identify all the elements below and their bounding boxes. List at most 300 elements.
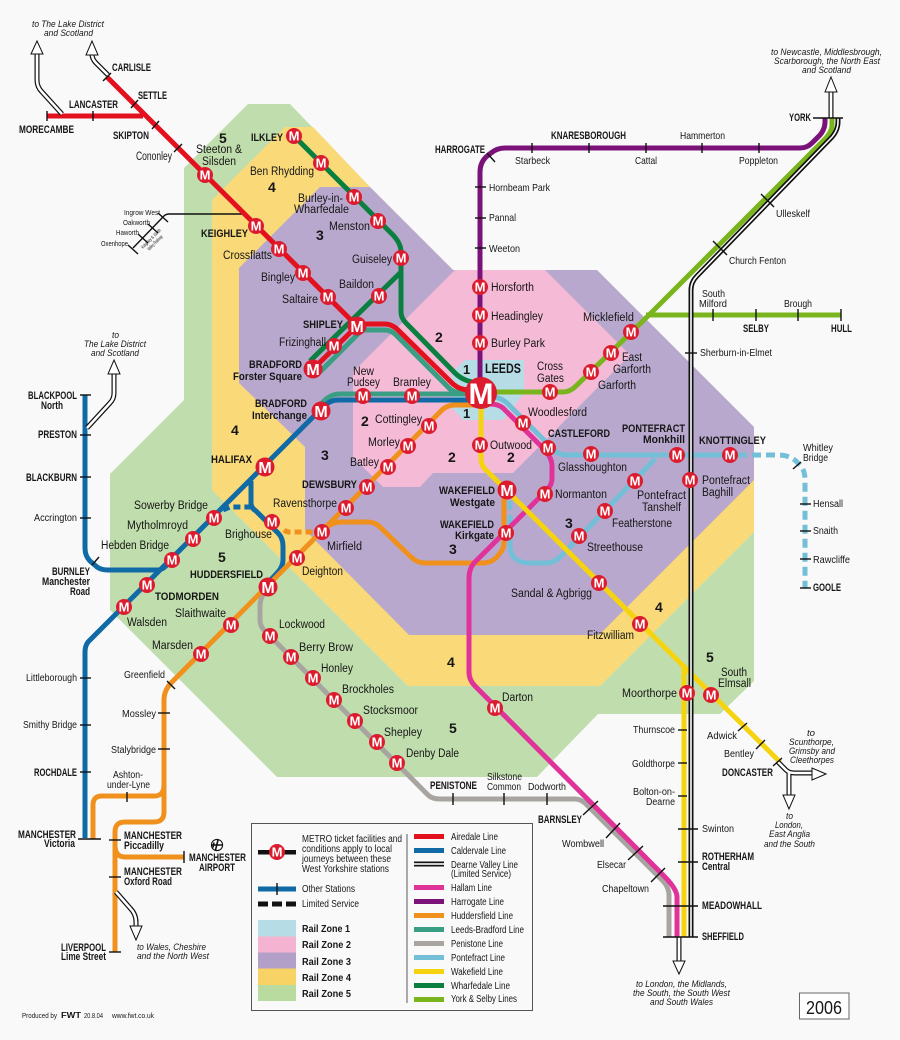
- station: Berry Brow: M: [286, 650, 296, 665]
- station: Wakefield Westgate: [439, 480, 516, 509]
- station: Menston: Menston: [329, 221, 370, 233]
- legend: line colour key: Hallam Line: [451, 883, 492, 894]
- station: Darton: Darton: [502, 692, 533, 704]
- icon: airport plane: [211, 839, 223, 851]
- station: Fitzwilliam: Fitzwilliam: [587, 630, 634, 642]
- station: Sandal and Agbrigg: Sandal & Agbrigg: [511, 588, 592, 600]
- arrow: Preston to Scotland: and Scotland: [91, 348, 140, 359]
- Keighley and Worth Valley Railway branch: Oakworth: [123, 218, 150, 227]
- zone numbers: 1: [463, 406, 470, 421]
- station: Garforth: [583, 364, 636, 392]
- station: Burley-in-Wharfedale: Burley-in-: [298, 193, 343, 205]
- station: Marsden: Marsden: [152, 640, 193, 652]
- station: South Elmsall: Elmsall: [718, 678, 751, 690]
- stops: Harrogate line: Cattal: [635, 155, 657, 167]
- station: Ben Rhydding: [250, 155, 329, 178]
- arrow: Manchester to Wales: and the North West: [137, 951, 209, 962]
- station: Wakefield Westgate: M: [500, 483, 514, 500]
- legend: line colour key: Leeds-Bradford Line: [451, 925, 524, 936]
- station: Outwood: Outwood: [490, 440, 532, 452]
- arrow: Doncaster to Scunthorpe and London: East Anglia: [769, 829, 810, 840]
- zone numbers: 5: [449, 720, 457, 736]
- station: Leeds hub: [465, 360, 521, 411]
- arrow: to The Lake District left: and Scotland: [44, 28, 94, 39]
- legend: line colour key: Caldervale Line: [451, 846, 506, 857]
- stops: Caldervale outer stations: North: [41, 400, 63, 412]
- station: Castleford: M: [543, 441, 553, 456]
- zone numbers: 3: [565, 515, 573, 531]
- station: Micklefield: [583, 312, 639, 340]
- Keighley and Worth Valley Railway branch: Keighley & Worth: [140, 228, 163, 250]
- stops: Dearne Valley and Wakefield south: MEADOWHALL: [702, 900, 762, 912]
- station: Shepley: M: [372, 735, 382, 750]
- stops: York and Selby lines: South: [702, 288, 725, 300]
- station: Mirfield: [314, 524, 362, 553]
- station: Shipley: SHIPLEY: [303, 319, 344, 331]
- station: Halifax: M: [258, 460, 272, 477]
- legend: rail zones: Rail Zone 4: [302, 973, 351, 984]
- stops: Dearne Valley and Wakefield south: Bolton-on-: [633, 787, 675, 798]
- station: Bramley: [393, 377, 431, 404]
- station: Walsden: Walsden: [127, 617, 167, 629]
- station: Menston: [329, 213, 386, 233]
- station: Halifax: HALIFAX: [211, 454, 253, 466]
- Keighley and Worth Valley Railway branch: Oxenhope: [101, 239, 128, 248]
- station: Burley Park: M: [475, 336, 485, 351]
- station: Bramley: M: [407, 389, 417, 404]
- station: Batley: Batley: [350, 457, 379, 469]
- legend: METRO station key: West Yorkshire stations: [302, 864, 389, 875]
- station: Todmorden: [139, 577, 219, 603]
- Keighley and Worth Valley Railway branch: Haworth: [116, 228, 139, 237]
- station: Berry Brow: [283, 642, 354, 665]
- stops: Penistone and Hallam south: Chapeltown: [602, 884, 649, 895]
- station: Baildon: M: [374, 289, 384, 304]
- station: Garforth: Garforth: [598, 380, 636, 392]
- station: Marsden: M: [196, 647, 206, 662]
- stops: Dearne Valley and Wakefield south: Bentley: [724, 749, 754, 760]
- producer credit: www.fwt.co.uk: [111, 1013, 154, 1020]
- stops: Dearne Valley and Wakefield south: DONCASTER: [722, 767, 773, 779]
- stops: Caldervale outer stations: Victoria: [44, 838, 76, 850]
- line: Hallam: [469, 404, 677, 937]
- stops: Caldervale outer stations: MANCHESTER: [18, 829, 76, 841]
- producer credit: 20.8.04: [84, 1013, 103, 1020]
- station: Bradford Interchange: [252, 398, 330, 422]
- station: Stocksmoor: Stocksmoor: [363, 705, 418, 717]
- station: Burley-in-Wharfedale: Wharfedale: [294, 204, 349, 216]
- station: Horsforth: M: [475, 280, 485, 295]
- station: Saltaire: M: [323, 290, 333, 305]
- zone 3 area: [239, 187, 754, 635]
- stops: Dearne Valley and Wakefield south: Adwick: [707, 731, 738, 742]
- station: Wakefield Kirkgate: M: [501, 526, 511, 541]
- station: Sandal and Agbrigg: M: [594, 576, 604, 591]
- station: Saltaire: Saltaire: [282, 294, 318, 306]
- stops: Caldervale outer stations: PRESTON: [38, 429, 77, 441]
- arrow: York to the north: Scarborough, the North East: [774, 56, 880, 67]
- stops: Dearne Valley and Wakefield south: Goldthorpe: [632, 759, 675, 770]
- arrow: Preston to Scotland: [84, 330, 146, 428]
- zone numbers: 4: [447, 654, 455, 670]
- stops: Huddersfield outer stations: [61, 670, 246, 963]
- station: Ravensthorpe: Ravensthorpe: [273, 498, 337, 510]
- zone numbers: 4: [268, 179, 276, 195]
- station: Hebden Bridge: M: [167, 553, 177, 568]
- station: Morley: M: [403, 439, 413, 454]
- stops: Huddersfield outer stations: MANCHESTER: [124, 830, 182, 842]
- stops: Dearne Valley and Wakefield south: Swinton: [702, 824, 734, 835]
- zone numbers: 4: [655, 599, 663, 615]
- station: Bradford Interchange: BRADFORD: [255, 398, 307, 410]
- station: Brighouse: M: [267, 515, 277, 530]
- arrow: Carlisle to Scotland: [86, 41, 108, 75]
- line: Wharfedale: [294, 136, 472, 382]
- station: Brighouse: [225, 514, 280, 541]
- stops: Harrogate line: KNARESBOROUGH: [551, 130, 626, 142]
- legend: limited service: Limited Service: [302, 899, 359, 910]
- stops: Dearne Valley and Wakefield south: Central: [702, 861, 730, 873]
- station: Brockholes: [326, 684, 394, 708]
- stops: Huddersfield outer stations: under-Lyne: [107, 780, 150, 791]
- station: Pontefract Baghill: Pontefract: [702, 475, 751, 487]
- legend: limited service: [258, 899, 359, 910]
- station: Bradford Forster Square: [233, 359, 322, 383]
- legend: other stations: Other Stations: [302, 884, 355, 895]
- station: Darton: [487, 692, 533, 716]
- stops: Huddersfield outer stations: Oxford Road: [124, 876, 172, 888]
- station: Sowerby Bridge: M: [209, 511, 219, 526]
- legend: METRO station key: conditions apply to local: [302, 844, 392, 855]
- producer credit: FWT: [61, 1011, 81, 1020]
- station: Todmorden: TODMORDEN: [155, 591, 219, 603]
- station: Woodlesford: Woodlesford: [528, 407, 587, 419]
- producer credit: Produced by: [22, 1013, 57, 1020]
- producer credit: [22, 1011, 154, 1020]
- station: Hebden Bridge: [101, 540, 180, 568]
- station: Stocksmoor: M: [350, 714, 360, 729]
- stops: Penistone and Hallam south: PENISTONE: [430, 780, 477, 792]
- stops: Penistone and Hallam south: [430, 772, 665, 895]
- station: Frizinghall: Frizinghall: [279, 337, 326, 349]
- station: Cottingley: [375, 414, 437, 434]
- station: Pontefract Baghill: Baghill: [702, 487, 733, 499]
- station: Halifax: [211, 454, 274, 477]
- line: Pontefract limited service: [510, 455, 805, 588]
- legend: line colour key: Harrogate Line: [451, 897, 504, 908]
- stops: York and Selby lines: Church Fenton: [729, 255, 786, 267]
- station: Honley: M: [308, 671, 318, 686]
- station: Bramley: Bramley: [393, 377, 431, 389]
- station: Mirfield: M: [317, 525, 327, 540]
- station: Huddersfield: M: [261, 580, 275, 597]
- station: Ilkley: ILKLEY: [251, 132, 284, 144]
- stops: Harrogate line: Hornbeam Park: [489, 182, 551, 194]
- station: East Garforth: M: [606, 346, 616, 361]
- station: Guiseley: M: [396, 251, 406, 266]
- Keighley and Worth Valley Railway branch: Valley Railway: [146, 234, 165, 252]
- station: Morley: [368, 437, 416, 454]
- line: Penistone: [260, 592, 669, 937]
- stops: Caldervale outer stations: Accrington: [34, 513, 77, 524]
- zone numbers: 5: [219, 130, 227, 146]
- station: Bradford Forster Square: BRADFORD: [249, 359, 302, 371]
- station: Knottingley: M: [725, 448, 735, 463]
- station: Huddersfield: HUDDERSFIELD: [190, 569, 263, 581]
- station: Pontefract Tanshelf: Tanshelf: [642, 502, 682, 514]
- station: New Pudsey: M: [358, 389, 368, 404]
- station: Slaithwaite: Slaithwaite: [175, 608, 226, 620]
- station: Lockwood: [262, 619, 325, 644]
- station: Streethouse: [571, 528, 643, 554]
- station: East Garforth: [603, 345, 651, 376]
- station: Headingley: [472, 307, 543, 323]
- stops: York and Selby lines: Sherburn-in-Elmet: [700, 347, 772, 359]
- arrow: Doncaster to Scunthorpe and London: London,: [775, 820, 803, 831]
- panel: legend: [252, 824, 532, 1010]
- legend: line colour key: York & Selby Lines: [451, 994, 517, 1005]
- station: Fitzwilliam: [587, 616, 648, 642]
- arrow: Doncaster to Scunthorpe and London: to: [786, 811, 793, 822]
- stops: Harrogate line: Starbeck: [515, 155, 551, 167]
- legend: line colour key: Wharfedale Line: [451, 981, 510, 992]
- stops: Goole branch: [793, 443, 850, 594]
- arrow: Doncaster to Scunthorpe and London: Grimsby and: [789, 746, 836, 757]
- station: Dewsbury: DEWSBURY: [302, 479, 358, 491]
- station: Sowerby Bridge: Sowerby Bridge: [134, 500, 208, 512]
- stops: York and Selby lines: HULL: [831, 323, 852, 335]
- zone numbers: [218, 130, 714, 736]
- stops: Huddersfield outer stations: AIRPORT: [199, 862, 235, 874]
- zone numbers: 2: [507, 449, 515, 465]
- stops: York and Selby lines: Milford: [699, 298, 727, 310]
- station: Bradford Interchange: Interchange: [252, 410, 307, 422]
- line: Airedale: [47, 77, 481, 392]
- legend: line colour key: [414, 832, 524, 1005]
- Keighley and Worth Valley Railway branch: Ingrow West: [124, 208, 161, 217]
- arrow: Doncaster to Scunthorpe and London: [764, 728, 836, 850]
- stops: Huddersfield outer stations: Lime Street: [61, 951, 106, 963]
- stops: Huddersfield outer stations: Stalybridge: [111, 745, 156, 756]
- station: Headingley: Headingley: [491, 311, 543, 323]
- station: Mytholmroyd: Mytholmroyd: [127, 520, 188, 532]
- station: Outwood: [472, 437, 532, 453]
- line: Caldervale: [85, 395, 481, 838]
- station: Steeton and Silsden: [196, 144, 242, 183]
- station: New Pudsey: New: [353, 366, 375, 378]
- stops: Caldervale outer stations: [18, 390, 101, 850]
- arrow: Preston to Scotland: to: [112, 330, 119, 341]
- station: Featherstone: Featherstone: [612, 518, 672, 530]
- station: Ilkley: [251, 128, 302, 144]
- stops: Penistone and Hallam south: BARNSLEY: [538, 814, 582, 826]
- stops: Airedale outer stations: Cononley: [136, 151, 172, 163]
- station: Burley-in-Wharfedale: [294, 189, 362, 216]
- stops: Dearne Valley and Wakefield south: [632, 723, 782, 943]
- station: East Garforth: East: [622, 352, 643, 364]
- stops: Goole branch: GOOLE: [813, 582, 841, 594]
- station: Headingley: M: [475, 308, 485, 323]
- zone numbers: 4: [231, 422, 239, 438]
- station: Pontefract Tanshelf: [627, 473, 687, 514]
- station: Castleford: [540, 428, 610, 456]
- station: Honley: Honley: [321, 663, 353, 675]
- station: Horsforth: [472, 279, 534, 295]
- stops: Harrogate line: Weeton: [489, 243, 520, 255]
- station: Castleford: CASTLEFORD: [548, 428, 610, 440]
- stops: Dearne Valley and Wakefield south: Thurnscoe: [633, 725, 675, 736]
- legend: METRO station key: journeys between these: [301, 854, 391, 865]
- station: Streethouse: M: [574, 529, 584, 544]
- station: Walsden: [116, 599, 167, 629]
- station: South Elmsall: South: [721, 667, 747, 679]
- station: Crossflatts: Crossflatts: [223, 250, 272, 262]
- line: Pontefract: [495, 397, 735, 563]
- station: Steeton and Silsden: Silsden: [202, 156, 236, 168]
- stops: York and Selby lines: Brough: [784, 298, 812, 310]
- zone numbers: 3: [321, 447, 329, 463]
- station: Denby Dale: [389, 748, 459, 771]
- station: Keighley: KEIGHLEY: [201, 228, 249, 240]
- station: Normanton: [537, 486, 607, 502]
- station: Burley Park: [472, 335, 545, 351]
- station: Shipley: [303, 316, 366, 336]
- station: Bradford Forster Square: M: [306, 362, 320, 379]
- station: Pontefract Tanshelf: Pontefract: [637, 490, 687, 502]
- arrow: Doncaster to Scunthorpe and London: Scunthorpe,: [789, 737, 834, 748]
- legend: line colour key: Penistone Line: [451, 939, 503, 950]
- station: South Elmsall: [703, 667, 751, 703]
- stops: Goole branch: Whitley: [803, 443, 833, 454]
- station: Wakefield Kirkgate: WAKEFIELD: [440, 519, 494, 531]
- line: Leeds-Bradford: [320, 330, 481, 403]
- line: Caldervale limited service: [223, 507, 252, 510]
- stops: Airedale outer stations: SKIPTON: [113, 130, 149, 142]
- station: Denby Dale: M: [392, 756, 402, 771]
- station: Brockholes: M: [329, 693, 339, 708]
- station: Knottingley: KNOTTINGLEY: [699, 435, 767, 447]
- station: Outwood: M: [475, 438, 485, 453]
- zone numbers: 2: [435, 329, 443, 345]
- arrow: York to the north: to Newcastle, Middlesbrough,: [771, 47, 882, 58]
- station: Pontefract Monkhill: PONTEFRACT: [622, 423, 685, 435]
- stops: Caldervale outer stations: BLACKPOOL: [28, 390, 77, 402]
- station: Walsden: M: [119, 600, 129, 615]
- station: Ben Rhydding: M: [316, 156, 326, 171]
- line: Harrogate: [480, 118, 825, 393]
- legend: METRO station key: METRO ticket facilities and: [302, 834, 402, 845]
- stops: Huddersfield outer stations: LIVERPOOL: [61, 942, 106, 954]
- station: Slaithwaite: M: [226, 618, 236, 633]
- station: Cross Gates: Cross: [537, 361, 563, 373]
- stops: Goole branch: Rawcliffe: [813, 555, 850, 566]
- station: New Pudsey: Pudsey: [347, 377, 380, 389]
- station: Cross Gates: Gates: [537, 373, 564, 385]
- station: Lockwood: M: [265, 629, 275, 644]
- station: Wakefield Kirkgate: [440, 519, 514, 542]
- station: Normanton: M: [540, 487, 550, 502]
- legend: rail zones: Rail Zone 5: [302, 989, 351, 1000]
- station: Horsforth: Horsforth: [491, 282, 534, 294]
- stops: Harrogate line: Pannal: [489, 212, 516, 224]
- arrow: York to the north: and Scotland: [802, 65, 852, 76]
- arrow: Doncaster to Scunthorpe and London: Cleethorpes: [790, 755, 834, 766]
- stops: Penistone and Hallam south: Common: [487, 782, 521, 793]
- station: Dewsbury: M: [362, 480, 372, 495]
- station: Cottingley: Cottingley: [375, 414, 422, 426]
- stops: Huddersfield outer stations: Piccadilly: [124, 840, 165, 852]
- station: Micklefield: M: [626, 325, 636, 340]
- station: Mirfield: Mirfield: [327, 541, 362, 553]
- station: Batley: [350, 457, 396, 475]
- Keighley and Worth Valley Railway branch: [101, 208, 242, 254]
- station: Baildon: Baildon: [339, 279, 374, 291]
- station: Darton: M: [490, 701, 500, 716]
- station: Hebden Bridge: Hebden Bridge: [101, 540, 169, 552]
- station: Pontefract Monkhill: Monkhill: [643, 434, 685, 446]
- stops: Huddersfield outer stations: Mossley: [122, 709, 156, 720]
- station: Normanton: Normanton: [555, 489, 607, 501]
- station: Deighton: M: [292, 551, 302, 566]
- stops: York and Selby lines: SELBY: [743, 323, 769, 335]
- station: Deighton: Deighton: [302, 566, 343, 578]
- line: Wakefield: [481, 400, 780, 937]
- station: Leeds hub: LEEDS: [485, 360, 521, 376]
- station: Featherstone: M: [600, 504, 610, 519]
- legend: line colour key: (Limited Service): [451, 869, 511, 880]
- station: Fitzwilliam: M: [635, 617, 645, 632]
- station: Morley: Morley: [368, 437, 400, 449]
- station: Crossflatts: [223, 241, 287, 262]
- station: Keighley: M: [251, 219, 261, 234]
- station: Mytholmroyd: [127, 520, 201, 547]
- arrow: Sheffield to London: [633, 937, 730, 1008]
- station: New Pudsey: [347, 366, 380, 404]
- stops: Airedale outer stations: [19, 62, 182, 163]
- stops: Dearne Valley and Wakefield south: Dearne: [646, 797, 675, 808]
- station: Bradford Forster Square: Forster Square: [233, 371, 302, 383]
- legend: rail zones: Rail Zone 1: [302, 924, 350, 935]
- legend: rail zones: Rail Zone 2: [302, 940, 351, 951]
- station: Garforth: M: [586, 365, 596, 380]
- station: Pontefract Monkhill: M: [672, 448, 682, 463]
- station: South Elmsall: M: [706, 688, 716, 703]
- station: Brockholes: Brockholes: [342, 684, 394, 696]
- station: Menston: M: [373, 214, 383, 229]
- station: Wakefield Westgate: Westgate: [450, 497, 495, 509]
- stops: Airedale outer stations: CARLISLE: [112, 62, 151, 74]
- legend: rail zones: [258, 920, 351, 1001]
- zone numbers: 2: [448, 449, 456, 465]
- station: Dewsbury: [302, 479, 375, 495]
- legend: line colour key: Pontefract Line: [451, 953, 505, 964]
- zone 5 area: [110, 104, 754, 777]
- stops: Caldervale outer stations: Littleborough: [26, 673, 77, 684]
- zone 1 area: [452, 360, 524, 420]
- station: Leeds hub: M: [468, 378, 494, 411]
- station: Shepley: [369, 727, 422, 750]
- station: Featherstone: [597, 503, 672, 530]
- zone numbers: 3: [449, 541, 457, 557]
- arrow: Sheffield to London: and South Wales: [650, 997, 713, 1008]
- zone 2 area: [353, 270, 630, 487]
- station: Shepley: Shepley: [384, 727, 422, 739]
- station: Steeton and Silsden: M: [200, 168, 210, 183]
- station: Wakefield Westgate: WAKEFIELD: [439, 485, 495, 497]
- station: Frizinghall: M: [329, 339, 339, 354]
- stops: Caldervale outer stations: ROCHDALE: [34, 767, 77, 779]
- stops: Harrogate line: HARROGATE: [435, 144, 485, 156]
